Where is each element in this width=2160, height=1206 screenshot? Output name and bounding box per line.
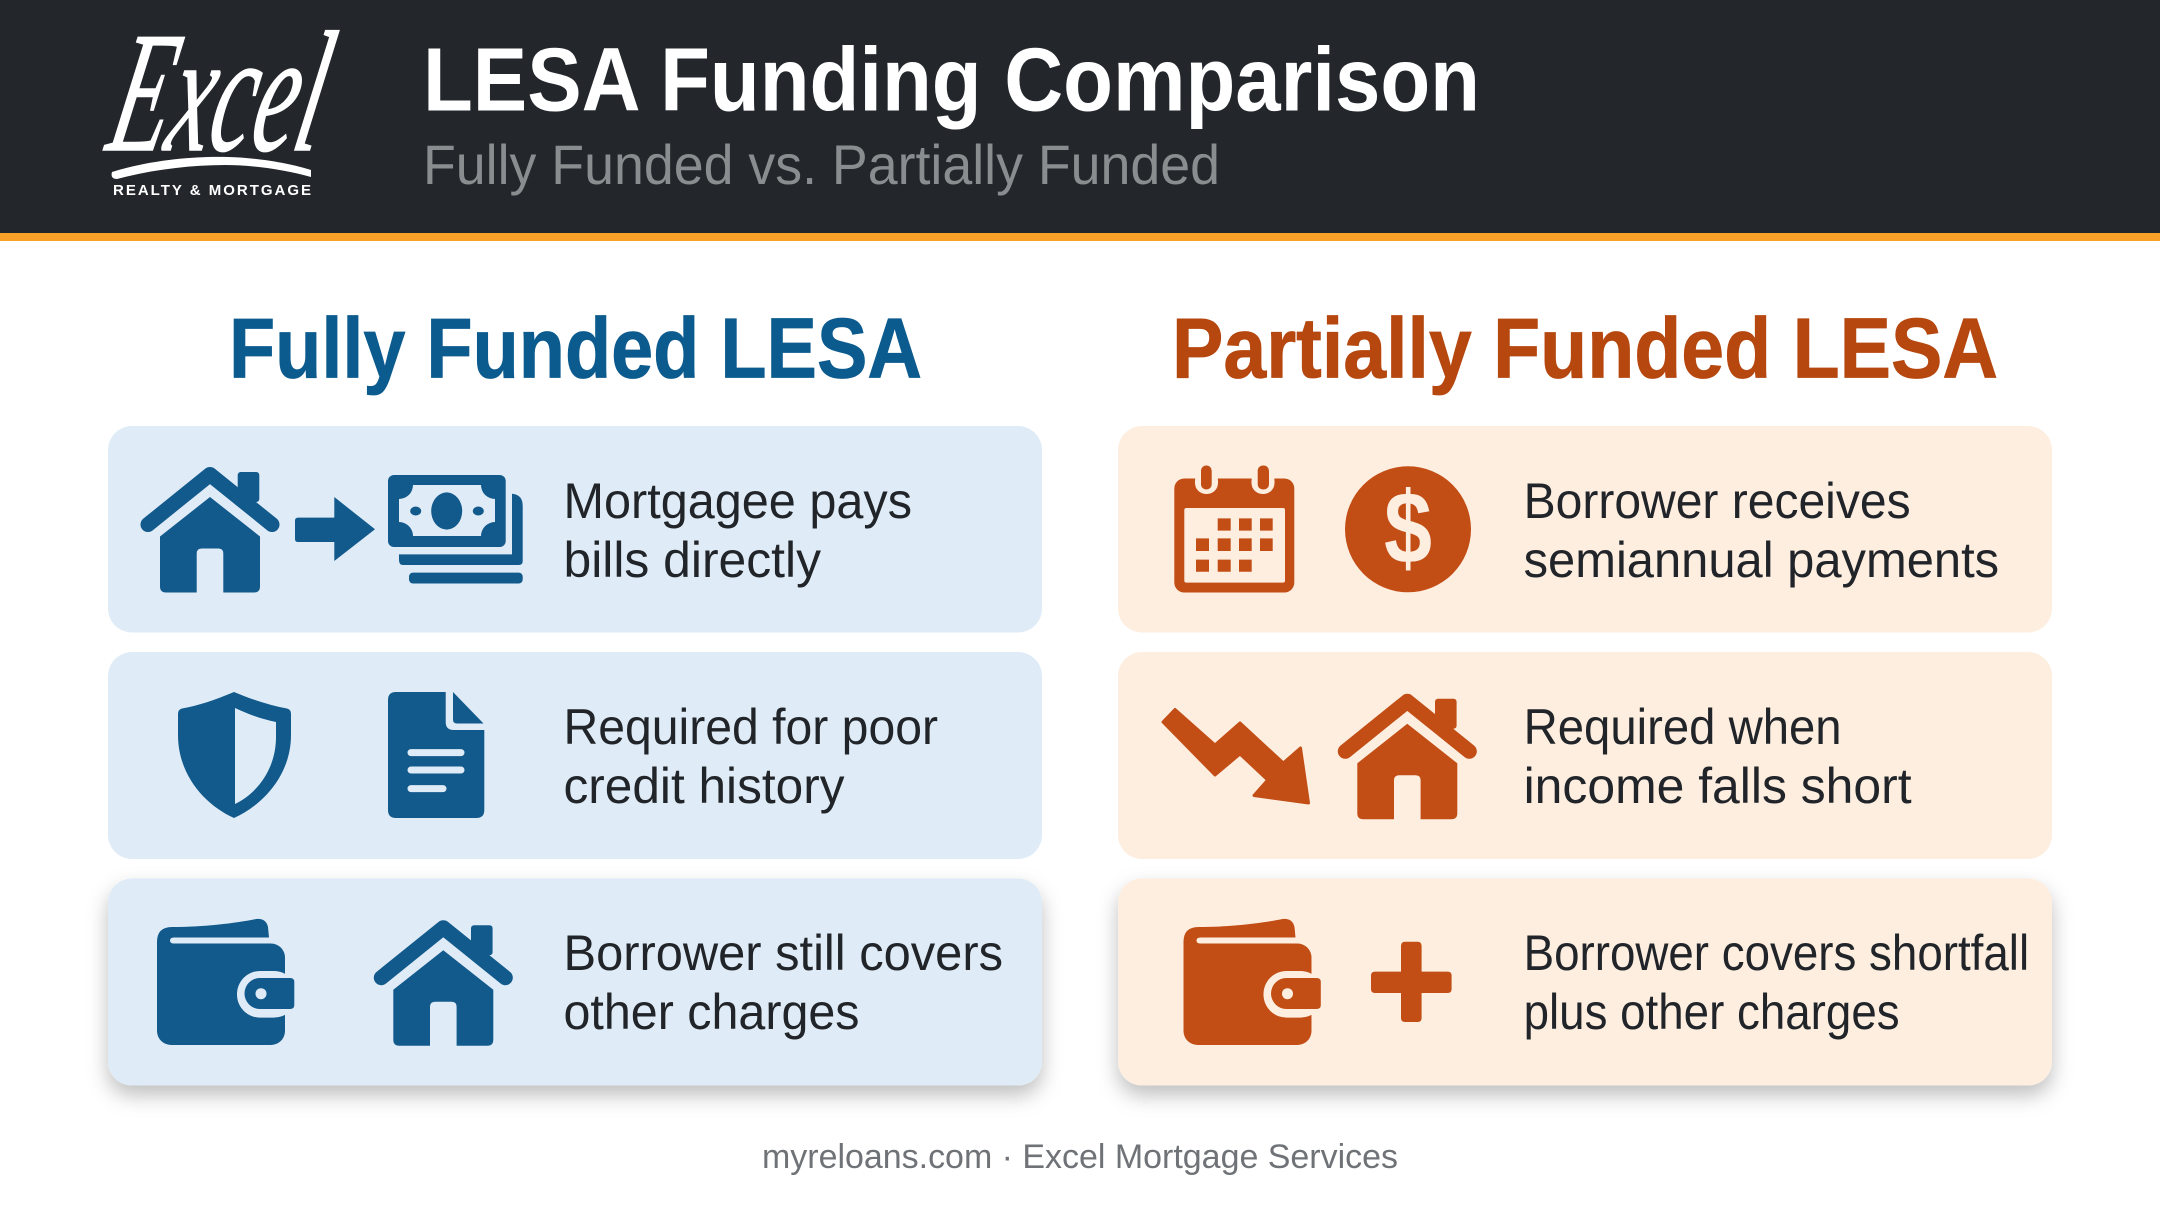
text bbox=[1524, 698, 1912, 814]
panel: borrower still covers other charges bbox=[108, 878, 1042, 1086]
header band bbox=[0, 0, 2160, 241]
text bbox=[564, 698, 938, 814]
icon: stack of money bbox=[388, 475, 523, 584]
text: Required when bbox=[1524, 698, 1842, 755]
logo: Excel Realty & Mortgage: Excel bbox=[94, 0, 349, 188]
text: semiannual payments bbox=[1524, 531, 1999, 588]
heading: Fully Funded LESA: Fully Funded LESA bbox=[229, 302, 922, 396]
text: Mortgagee pays bbox=[564, 472, 912, 529]
heading: Partially Funded LESA: Partially Funded LESA bbox=[1172, 302, 1998, 396]
icon: plus bbox=[1371, 942, 1452, 1022]
text: income falls short bbox=[1524, 757, 1912, 814]
subtitle: Fully Funded vs. Partially Funded bbox=[423, 133, 1220, 196]
icon: dollar coin bbox=[1345, 466, 1471, 592]
text: credit history bbox=[564, 757, 845, 814]
icon: falling arrow bbox=[1163, 710, 1308, 803]
icon: arrow bbox=[295, 497, 375, 561]
icon: document bbox=[388, 692, 484, 818]
text: Borrower covers shortfall bbox=[1524, 924, 2029, 981]
panel: required for poor credit history bbox=[108, 652, 1042, 859]
text: Borrower still covers bbox=[564, 924, 1003, 981]
panel: borrower receives semiannual payments bbox=[1118, 426, 2052, 632]
logo: Excel Realty & Mortgage: REALTY & MORTGAGE bbox=[113, 182, 311, 199]
text: other charges bbox=[564, 983, 860, 1040]
text: bills directly bbox=[564, 531, 822, 588]
icon: house bbox=[148, 472, 272, 592]
panel: borrower covers shortfall plus other charges bbox=[1118, 878, 2052, 1086]
text: plus other charges bbox=[1524, 983, 1900, 1040]
icon: wallet bbox=[1184, 919, 1324, 1045]
logo: Excel Realty & Mortgage bbox=[94, 0, 349, 199]
text: Borrower receives bbox=[1524, 472, 1911, 529]
text bbox=[1524, 472, 1999, 588]
text bbox=[564, 924, 1003, 1040]
icon: house bbox=[1345, 699, 1469, 819]
text bbox=[564, 472, 912, 588]
text: Required for poor bbox=[564, 698, 938, 755]
icon: wallet bbox=[157, 919, 297, 1045]
icon: dollar coin: $ bbox=[1384, 471, 1432, 585]
footer source line: myreloans.com · Excel Mortgage Services bbox=[762, 1138, 1398, 1176]
icon: shield bbox=[178, 692, 291, 818]
text bbox=[1524, 924, 2029, 1040]
panel: required when income falls short bbox=[1118, 652, 2052, 859]
panel: mortgagee pays bills directly bbox=[108, 426, 1042, 632]
icon: calendar bbox=[1174, 466, 1294, 592]
title: LESA Funding Comparison bbox=[423, 30, 1480, 130]
icon: house bbox=[381, 925, 505, 1046]
